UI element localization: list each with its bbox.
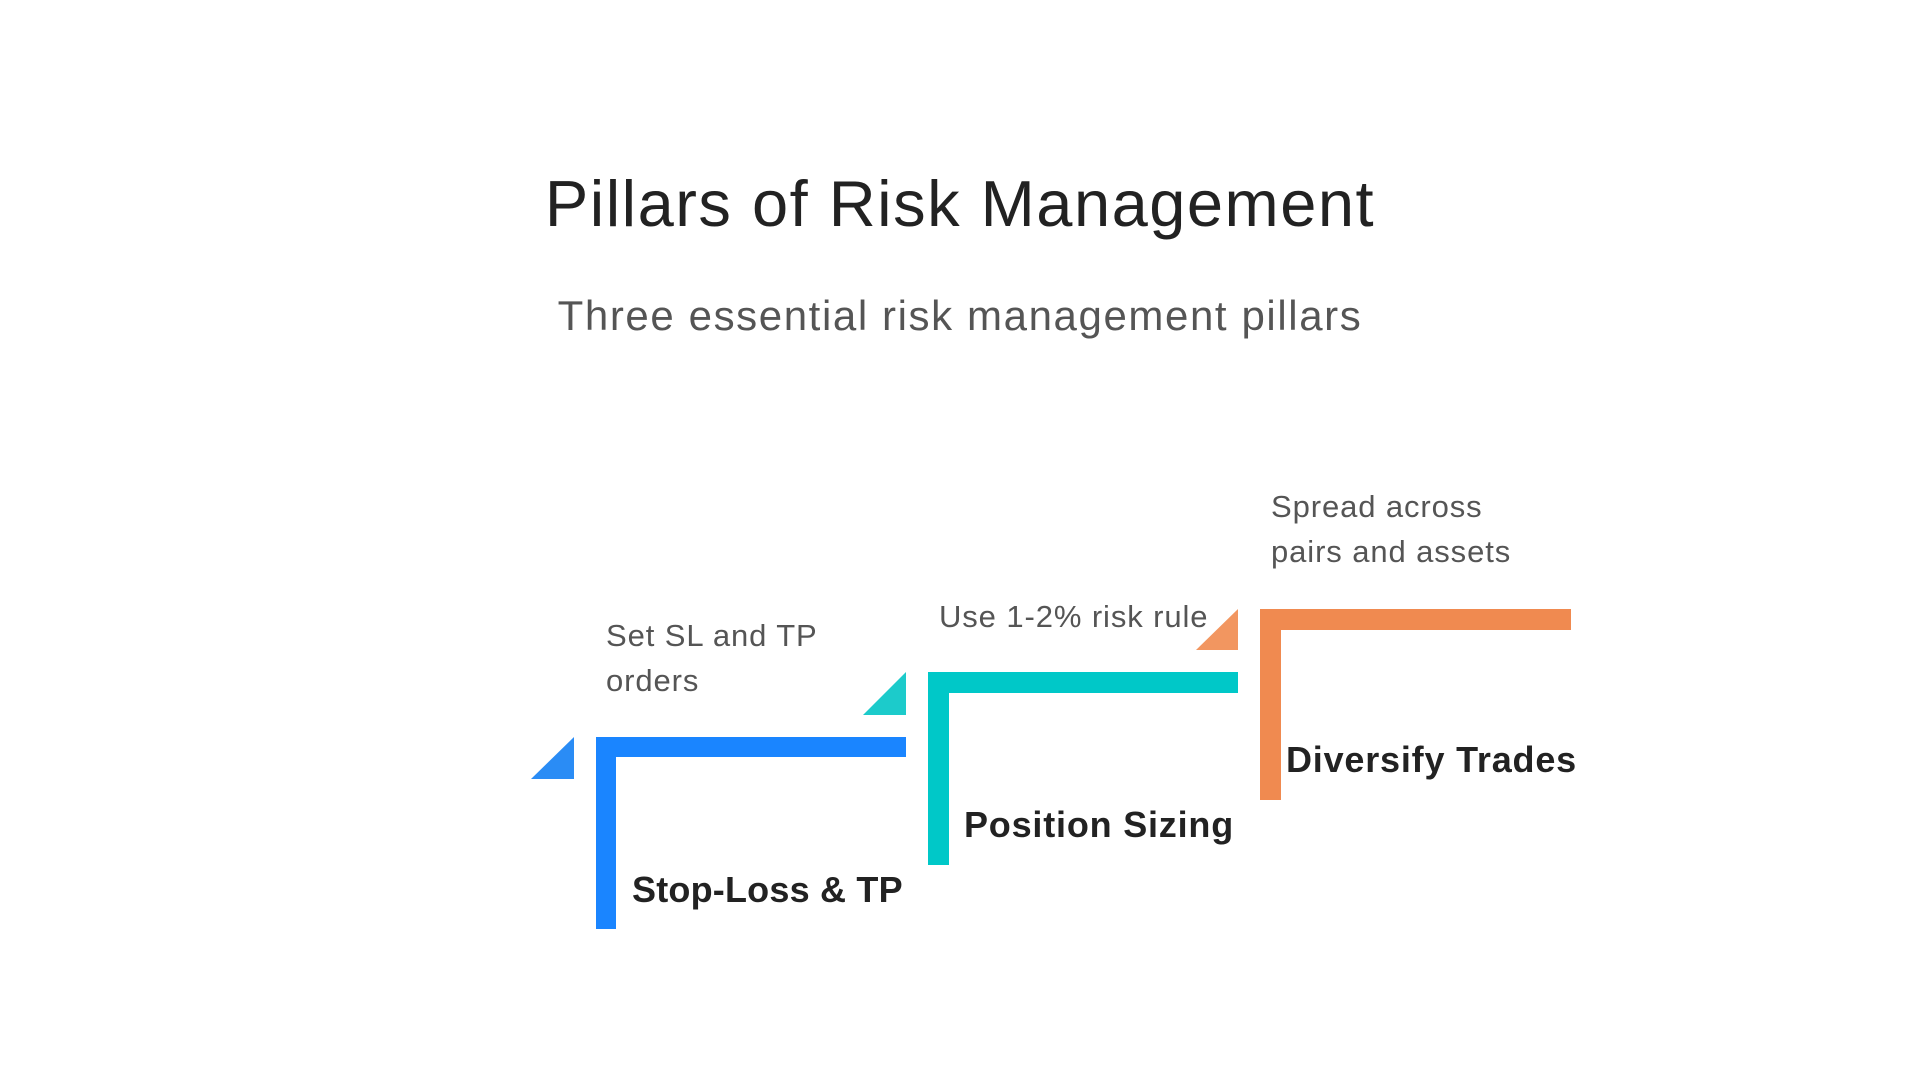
label 1: Stop-Loss & TP bbox=[632, 869, 903, 910]
description 3: pairs and assets bbox=[1271, 534, 1511, 569]
pillar 2: position sizing bbox=[863, 599, 1238, 865]
description 3 bbox=[1271, 489, 1511, 569]
description 1 bbox=[606, 618, 818, 698]
teal step shape bbox=[863, 672, 1238, 865]
description 3: Spread across bbox=[1271, 489, 1483, 524]
pillar 1: stop-loss bbox=[531, 618, 906, 929]
title: Pillars of Risk Management bbox=[545, 167, 1375, 240]
description 1: Set SL and TP bbox=[606, 618, 818, 653]
description 2: Use 1-2% risk rule bbox=[939, 599, 1208, 634]
subtitle: Three essential risk management pillars bbox=[558, 292, 1362, 339]
orange step shape bbox=[1196, 609, 1571, 800]
label 2: Position Sizing bbox=[964, 804, 1234, 845]
description 1: orders bbox=[606, 663, 699, 698]
label 3: Diversify Trades bbox=[1286, 739, 1577, 780]
pillar 3: diversify bbox=[1196, 489, 1577, 800]
blue step shape bbox=[531, 737, 906, 929]
